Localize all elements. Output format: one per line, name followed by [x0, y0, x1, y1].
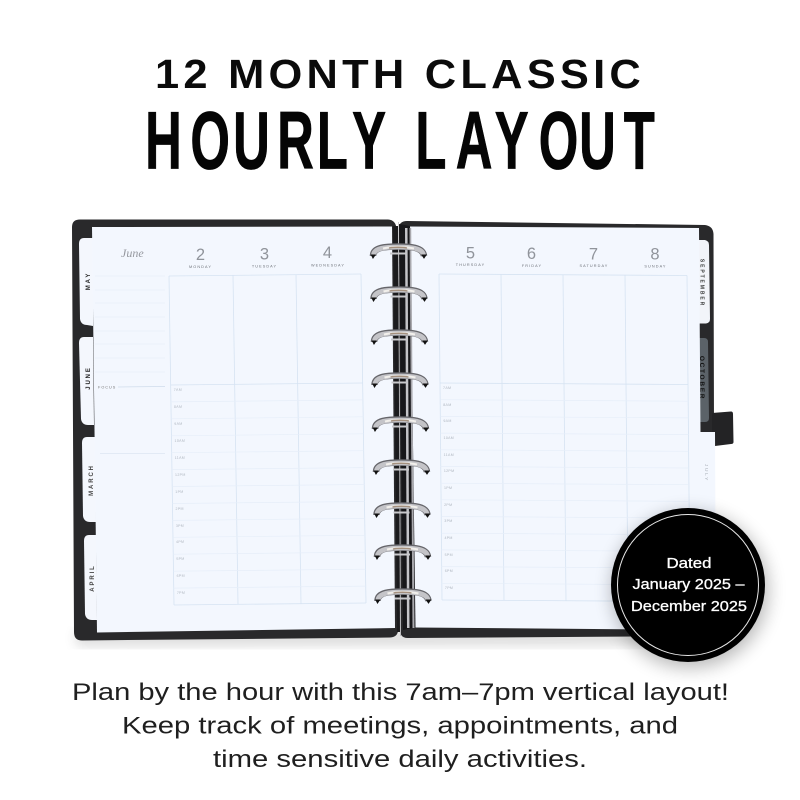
- tab label: October: OCTOBER: [698, 356, 705, 400]
- right page day headers: THURSDAY: [456, 263, 485, 267]
- left page hourly grid: 7AM: [174, 388, 182, 392]
- left page hourly grid: 2PM: [176, 507, 184, 511]
- right page hourly grid: 6PM: [445, 569, 453, 573]
- tab: September: [698, 240, 710, 324]
- left page sidebar: [95, 246, 165, 454]
- left page day headers: 3: [260, 246, 269, 264]
- left page hourly grid: 6PM: [177, 574, 185, 578]
- description text: Plan by the hour with this 7am–7pm vertical layout!: [72, 679, 729, 706]
- focus label: FOCUS: [98, 386, 116, 390]
- right page: [410, 226, 716, 630]
- right page day headers: 7: [589, 246, 598, 264]
- left page hourly grid: 4PM: [176, 540, 184, 544]
- right page hourly grid: [439, 274, 690, 601]
- left page day headers: 2: [196, 246, 205, 264]
- left page hourly grid: 12PM: [175, 473, 186, 477]
- right page hourly grid: 10AM: [443, 436, 454, 440]
- July tab label: JULY: [703, 464, 709, 482]
- left page hourly grid: 3PM: [176, 524, 184, 528]
- planner shadow: [76, 630, 720, 646]
- right cover: [398, 221, 716, 638]
- right page day headers: [456, 244, 667, 268]
- left page day headers: WEDNESDAY: [311, 264, 345, 268]
- right page hourly grid: 3PM: [444, 519, 453, 523]
- left page hourly grid: 1PM: [175, 490, 184, 494]
- left page tabs: [79, 238, 97, 620]
- badge: dated: January 2025 –: [632, 577, 746, 593]
- title: [145, 51, 655, 187]
- binding spine: [393, 222, 416, 636]
- left page day headers: TUESDAY: [252, 264, 277, 268]
- right page hourly grid: 7AM: [443, 386, 451, 390]
- description text: Keep track of meetings, appointments, and: [122, 712, 678, 740]
- bookmark tab: [712, 412, 734, 446]
- description text: [72, 679, 729, 773]
- tab label: September: SEPTEMBER: [698, 259, 704, 307]
- left cover: [72, 220, 398, 640]
- right page day headers: SUNDAY: [644, 264, 667, 268]
- description text: time sensitive daily activities.: [213, 746, 587, 773]
- badge: dated: [611, 508, 765, 662]
- badge ring: [618, 514, 758, 656]
- badge text: Dated: [666, 556, 712, 572]
- tab: April: [84, 535, 97, 620]
- right page hourly grid: 8AM: [443, 403, 452, 407]
- sidebar lines: [95, 276, 165, 454]
- left page hourly grid: 7PM: [177, 591, 185, 595]
- right page hourly grid: 11AM: [444, 453, 454, 457]
- left page hourly grid: 9AM: [174, 422, 183, 426]
- left page day headers: 4: [323, 244, 332, 262]
- left page hourly grid: [169, 274, 366, 605]
- left page hourly grid: 11AM: [175, 456, 185, 460]
- tab: March: [82, 437, 96, 522]
- month name: June: [121, 246, 144, 260]
- tab: October: [698, 338, 709, 422]
- right page hourly grid: 1PM: [444, 486, 452, 490]
- left page day headers: MONDAY: [189, 265, 212, 269]
- right page hourly grid: 12PM: [444, 469, 454, 473]
- left page: [92, 226, 395, 632]
- tab label: June: JUNE: [86, 366, 92, 390]
- metal rings: [372, 246, 430, 603]
- badge disc: [611, 508, 765, 662]
- right cover tabs: [698, 240, 710, 422]
- left page day headers: [189, 244, 345, 269]
- right page hourly grid: 9AM: [443, 419, 452, 423]
- tab label: May: MAY: [86, 272, 92, 290]
- badge shadow: [612, 512, 768, 668]
- left page hourly grid: 5PM: [176, 557, 185, 561]
- left page hourly grid: 10AM: [174, 439, 185, 443]
- right page hourly grid: 4PM: [444, 536, 453, 540]
- tab: June: [79, 337, 94, 425]
- title line: hourly layout: HOURLYLAYOUT: [145, 95, 655, 187]
- planner: [72, 220, 734, 640]
- right page day headers: 8: [650, 246, 660, 264]
- right page day headers: SATURDAY: [580, 264, 608, 268]
- right page day headers: 6: [527, 245, 536, 263]
- title line: 12 month classic: 12 MONTH CLASSIC: [155, 51, 645, 97]
- left page hourly grid: 8AM: [174, 405, 182, 409]
- right page day headers: FRIDAY: [522, 264, 542, 268]
- tab: May: [79, 238, 93, 326]
- right page hourly grid: 5PM: [445, 553, 453, 557]
- right page hourly grid: 7PM: [445, 586, 453, 590]
- tab label: March: MARCH: [89, 464, 95, 496]
- right page day headers: 5: [466, 244, 475, 262]
- badge: dated: December 2025: [631, 599, 747, 615]
- right page hourly grid: 2PM: [444, 503, 452, 507]
- tab label: April: APRIL: [90, 564, 96, 592]
